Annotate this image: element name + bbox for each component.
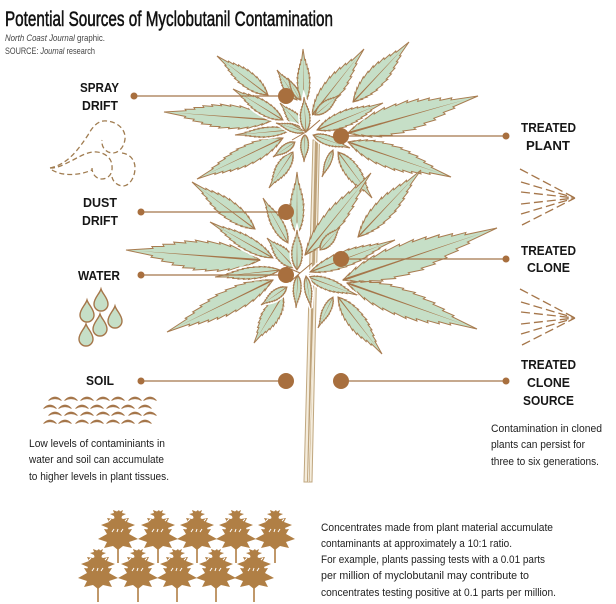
note: water and soil [28,438,169,483]
icon: soil layers [44,397,156,424]
credits: SOURCE: Journal research [5,46,95,57]
note: cloned plants: three to six generations. [491,456,599,468]
water marker [138,267,294,283]
label: treated clone source: TREATED [521,357,576,372]
note: water and soil: to higher levels in plant tissues. [29,471,169,483]
credits: North Coast Journal graphic. [5,33,105,44]
icon: rows of small plants [78,510,295,602]
note: concentrates: contaminants at approximately a 10:1 ratio. [321,538,512,550]
label: treated plant [521,120,576,153]
treated plant marker [333,128,510,144]
note: concentrates: For example, plants passing tests with a 0.01 parts [321,554,545,566]
title: Potential Sources of Myclobutanil Contamination [5,8,333,31]
label: spray drift: DRIFT [82,98,118,113]
note: concentrates: Concentrates made from plant material accumulate [321,522,553,534]
label: dust drift: DRIFT [82,213,118,228]
label: dust drift: DUST [83,195,117,210]
label: treated plant: PLANT [526,138,570,153]
label: treated clone source: CLONE [527,375,570,390]
note: cloned plants: Contamination in cloned [491,423,602,435]
note: concentrates [321,522,556,599]
label: dust drift [82,195,118,228]
label: treated clone source [521,357,576,408]
label: treated plant: TREATED [521,120,576,135]
note: cloned plants: plants can persist for [491,439,585,451]
note: water and soil: Low levels of contaminiants in [29,438,165,450]
dust drift marker [138,204,294,220]
note: water and soil: water and soil can accumulate [28,454,164,466]
icon: drifting spray cloud [50,121,135,186]
label: spray drift: SPRAY [80,80,119,95]
label: treated clone source: SOURCE [523,393,574,408]
label: treated clone: CLONE [527,260,570,275]
upper leaf cluster [163,35,482,202]
label: spray drift [80,80,119,113]
treated clone marker [333,251,510,267]
icon: spray nozzle pattern two [520,289,575,345]
credits [5,33,105,57]
spray drift marker [130,88,294,104]
leader lines and contamination points [130,88,510,389]
note: concentrates: concentrates testing positive at 0.1 parts per million. [321,587,556,599]
soil marker [138,373,294,389]
lower leaf cluster [125,163,502,360]
note: concentrates: per million of myclobutanil may contribute to [321,570,529,582]
icon: water drops [79,289,122,346]
note: cloned plants [491,423,602,468]
icon: spray nozzle pattern one [520,169,575,225]
label: soil: SOIL [86,373,114,388]
label: treated clone [521,243,576,275]
plant stem [304,140,320,482]
treated clone source marker [333,373,510,389]
label: water: WATER [78,268,121,283]
label: treated clone: TREATED [521,243,576,258]
